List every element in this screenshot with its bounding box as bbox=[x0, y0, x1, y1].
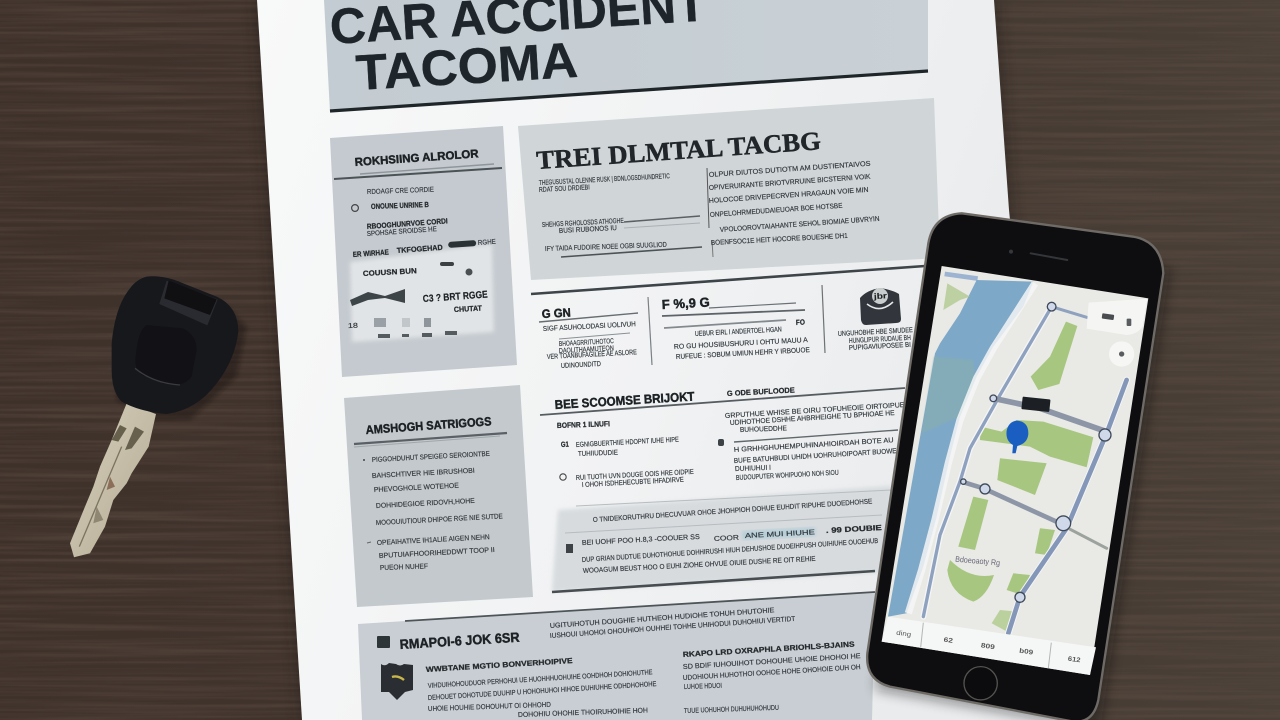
infographic sheet bbox=[257, 0, 1060, 720]
right list: H GRHHGHUHEMPUHINAHIOIRDAH BOTE AU bbox=[734, 437, 894, 454]
icon: badge with smile: jbr bbox=[872, 291, 887, 301]
panel: left lower services bbox=[344, 385, 533, 607]
left text and rules: RDAT SOU DRDIEBI bbox=[539, 184, 590, 194]
right list: DUHIUHUI I bbox=[735, 465, 771, 473]
panel heading: AMSHOGH SATRIGOGS bbox=[365, 414, 492, 437]
map compass button bbox=[1109, 341, 1134, 367]
washed out data block: C3 ? BRT RGGE bbox=[422, 289, 488, 305]
location pin bbox=[1006, 421, 1028, 453]
right paragraph: HOLOCOE DRIVEPECRVEN HRAGAUN VOIE MIN bbox=[709, 187, 869, 205]
column one: SIGF ASUHOLODASI UOLIVUH bbox=[543, 321, 636, 333]
highlighted info block: ANE MUI HIUHE bbox=[745, 529, 815, 540]
right list bbox=[718, 402, 905, 482]
right column text: SD BDIF IUHOUIHOT DOHOUHE UHOIE DHOHOI HE bbox=[683, 653, 861, 671]
column two: RO GU HOUSIBUSHURU I OHTU MAUU A bbox=[674, 337, 808, 351]
column one: DAOLITHAAMUTEON bbox=[559, 345, 614, 355]
list text: PIGGOHDUHUT SPEIGEO SEROIONTBE bbox=[372, 451, 490, 464]
washed out data block: ER WIRHAE bbox=[353, 248, 389, 259]
parks bbox=[947, 322, 1093, 633]
highlighted info block bbox=[566, 523, 882, 575]
panel: lower section report: G ODE BUFLOODE bbox=[727, 385, 795, 398]
left text and rules: IFY TAIDA FUDOIRE NOEE OGBI SUUGLIOD bbox=[545, 242, 667, 253]
key fob button bbox=[135, 325, 197, 385]
left text and rules: THEGUSUSTAL OLENNE RUSK | BDNLOGSDHUNDRETIC bbox=[539, 173, 670, 187]
car key bbox=[70, 276, 247, 557]
left text and rules: BUSI RUBONOS IU bbox=[559, 225, 617, 235]
highlighted info block: . 99 DOUBIE bbox=[826, 523, 882, 535]
right list: GRPUTHUE WHISE BE OIRU TOFUHEOIE OIRTOIPUE bbox=[725, 402, 905, 420]
map label: Bdoeoaoty Rg bbox=[955, 555, 1000, 568]
callout line: O TNIDEKORUTHRU DHECUVUAR OHOE JHOHPIOH DOHUE EUHDIT RIPUHE DUOEDHOHSE bbox=[593, 498, 873, 524]
right paragraph: VPOLOOROVTAIAHANTE SEHOL BIOMIAE UBVRYIN bbox=[720, 216, 880, 234]
icon: badge with smile bbox=[860, 288, 901, 325]
list text: ONOUNE UNRINE B bbox=[371, 200, 429, 211]
smartphone with map bbox=[867, 213, 1163, 720]
left list: TUHIIUDUDIE bbox=[578, 450, 618, 458]
panel heading: ROKHSIING ALROLOR bbox=[354, 148, 480, 169]
key fob slot bbox=[159, 281, 218, 325]
title line: tacoma: TACOMA bbox=[354, 32, 579, 101]
right list: UDIHOTHOE DSHHE AHBRHEIGHE TU BPHIOAE HE bbox=[730, 410, 895, 427]
washed out data block bbox=[348, 239, 496, 342]
list text: SPOHSAE SROIDSE HE bbox=[367, 226, 437, 238]
app tab bar: 612 bbox=[1067, 656, 1081, 664]
highlighted info block: COOR bbox=[714, 535, 739, 543]
right paragraph: ONPELOHRMEDUDAIEUOAR BOE HOTSBE bbox=[710, 203, 843, 219]
column three text: HUNGLIPUR RUDAUE BH bbox=[849, 335, 911, 345]
left text and rules: SHEHGS RGHOLOSDS ATHOGHE bbox=[542, 218, 624, 229]
panel: left upper summary bbox=[330, 126, 517, 377]
left column text: VIHDUIHOHOUDUOR PERHOHUI UE HUOHHHUOHUIHE OOHDHOH DOHIOHUTHE bbox=[428, 669, 653, 690]
app tab bar: 809 bbox=[980, 642, 996, 651]
map screen bbox=[882, 266, 1148, 675]
list text bbox=[363, 451, 503, 572]
left list: I OHOH ISDHEHECUBTE IHFADIRVE bbox=[582, 477, 684, 489]
title banner bbox=[324, 0, 928, 112]
column two: UEBUR EIRL I ANDERTOEL HGAN bbox=[695, 326, 782, 338]
list text: BPUTUIAFHOORIHEDDWT TOOP II bbox=[379, 547, 495, 560]
map bus marker bbox=[1021, 397, 1051, 412]
key blade bbox=[70, 403, 156, 557]
right column text: UDOHIOUH HUHOTHOI OOHOE HOHE OHOHOIE OUH OH bbox=[683, 664, 861, 682]
right list: BUDOUPUTER WOHIPUOHO NOH SIOU bbox=[736, 470, 839, 482]
left list bbox=[557, 419, 694, 489]
column two: F %,9 G bbox=[661, 295, 710, 312]
river bbox=[888, 280, 1033, 617]
list text: PHEVOGHOLE WOTEHOE bbox=[374, 483, 459, 494]
column one: UDINOUNDITD bbox=[561, 361, 601, 370]
right paragraph: OPIVERUIRANTE BRIOTVRRUINE BICSTERNI VOIK bbox=[709, 174, 871, 192]
list text: BAHSCHTIVER HIE IBRUSHOBI bbox=[372, 468, 475, 480]
column three text: UNGUHOBHE HBE SMUDEE bbox=[838, 327, 913, 338]
upper left land detail bbox=[943, 272, 978, 310]
column one: VER TOANBUFAGILEE AE ASLORE bbox=[547, 349, 637, 361]
key shadow bbox=[117, 280, 247, 420]
column two: RUFEUE : SOBUM UMIUN HEHR Y IRBOUOE bbox=[676, 347, 810, 361]
river green tint bbox=[922, 357, 975, 433]
column three text: PUPIGAVIUPOSEE BI bbox=[849, 342, 911, 352]
right paragraph: OLPUR DIUTOS DUTIOTM AM DUSTIENTAIVOS bbox=[709, 161, 871, 179]
left list: RUI TUOTH UVN DOUGE OOIS HRE OIDPIE bbox=[576, 469, 694, 482]
right list: BUHOUEDDHE bbox=[740, 425, 787, 434]
home button bbox=[964, 667, 997, 700]
panel: lower section report bbox=[540, 385, 905, 592]
right paragraph: BOENFSOC1E HEIT HOCORE BOUESHE DH1 bbox=[711, 233, 848, 247]
app tab bar bbox=[882, 617, 1096, 675]
left list: EGNIGBUERTHIIE HDOPNT IUHE HIPE bbox=[576, 437, 679, 449]
left column text: UHOIE HOUHIE DOHOUHUT OI OHHOHD bbox=[428, 702, 551, 713]
phone body bbox=[867, 213, 1163, 720]
left list: BOFNR 1 ILNUFI bbox=[557, 419, 610, 430]
column two bbox=[661, 295, 810, 361]
app tab bar: 62 bbox=[943, 637, 954, 645]
column one: G GN bbox=[541, 305, 571, 321]
list text: MOOOUIUTIOUR DHIPOE RGE NIE SUTDE bbox=[376, 513, 503, 527]
panel heading: RMAPOI-6 JOK 6SR bbox=[399, 630, 520, 652]
phone speaker and camera bbox=[1009, 250, 1067, 260]
panel: top right digital table bbox=[518, 98, 940, 280]
left column text: DOHOHIU OHOHIE THOIRUHOIHIE HOH bbox=[518, 707, 648, 719]
river bank bbox=[908, 283, 1035, 613]
washed out data block: CHUTAT bbox=[454, 304, 482, 314]
highlighted info block: WOOAGUM BEUST HOO O EUHI ZIOHE OHVUE OIUIE DUSHE RE OIT REHIE bbox=[583, 556, 816, 575]
right paragraph bbox=[709, 161, 880, 247]
key fob body bbox=[112, 276, 238, 414]
highlighted info block: BEI UOHF POO H.8,3 -COOUER SS bbox=[582, 534, 700, 547]
right column text bbox=[683, 640, 861, 715]
washed out data block: COUUSN BUN bbox=[363, 266, 417, 278]
column two: FO bbox=[796, 318, 805, 327]
list text: RBOOGHUNRVOE CORDI bbox=[367, 216, 448, 231]
column three text bbox=[838, 327, 913, 352]
map junctions bbox=[961, 302, 1111, 602]
road network bbox=[923, 307, 1127, 633]
app tab bar: ding bbox=[896, 630, 912, 639]
intro text: UGITUIHOTUH DOUGHIE HUTHEOH HUDIOHE TOHUH DHUTOHIE bbox=[550, 607, 775, 630]
left column text: DEHOUET DOHOTUDE DUUHIP U HOHOHUHOI HIHOE DUHIUHHE ODHDHOHOHE bbox=[428, 681, 657, 702]
list text: PUEOH NUHEF bbox=[380, 563, 428, 572]
map control panel bbox=[1087, 299, 1147, 335]
list text: RDOAGF CRE CORDIE bbox=[367, 187, 434, 196]
panel heading: TREI DLMTAL TACBG bbox=[535, 126, 822, 175]
intro text: IUSHOUI UHOHOI OHOUHIOH OUHHEI TOHHE UHIHODUI DUHOHIUI VERTIDT bbox=[550, 616, 796, 640]
icon: key fob badge bbox=[381, 663, 413, 700]
column one bbox=[539, 305, 638, 370]
paper shadow bbox=[252, 0, 1066, 720]
panel: bottom guidance bbox=[358, 592, 875, 720]
section heading: BEE SCOOMSE BRIJOKT bbox=[554, 389, 695, 412]
phone shadow bbox=[875, 222, 1170, 720]
left column text bbox=[426, 656, 657, 719]
right list: BUFE BATUHBUDI UHIDH UOHRUHOIPOART BUOWE bbox=[734, 448, 897, 465]
panel: three column facts bbox=[531, 266, 925, 370]
left list: G1 bbox=[561, 440, 569, 449]
washed out data block: 18 bbox=[348, 323, 358, 330]
washed out data block: TKFOGEHAD bbox=[397, 243, 444, 255]
washed out data block: RGHE bbox=[478, 239, 496, 247]
right column text: LUHOE HDUOI bbox=[684, 683, 722, 691]
list text: DOHHIDEGIOE RIDOVH,HOHE bbox=[376, 498, 475, 510]
column one: BHOAAGRRITUHOTOC bbox=[559, 338, 614, 348]
highlighted info block: DUP GRIAN DUDTUE DUHOTHOHUE DOHHIRUSHI HIUH DEHUSHOE DUOEIHPUSH OUIHIUHE OUOEHUB bbox=[582, 538, 879, 564]
app tab bar: b09 bbox=[1019, 648, 1034, 657]
left column text: WWBTANE MGTIO BONVERHOIPIVE bbox=[426, 656, 573, 674]
list text: OPEAIHATIVE IH1ALIE AIGEN NEHN bbox=[377, 534, 490, 547]
left text and rules bbox=[539, 173, 702, 257]
right column text: RKAPO LRD OXRAPHLA BRIOHLS-BJAINS bbox=[683, 640, 855, 659]
banner rule bbox=[330, 71, 928, 111]
right column text: TUUE UOHUHOH DUHUHUHOHUDU bbox=[684, 705, 779, 715]
list text bbox=[352, 187, 448, 238]
